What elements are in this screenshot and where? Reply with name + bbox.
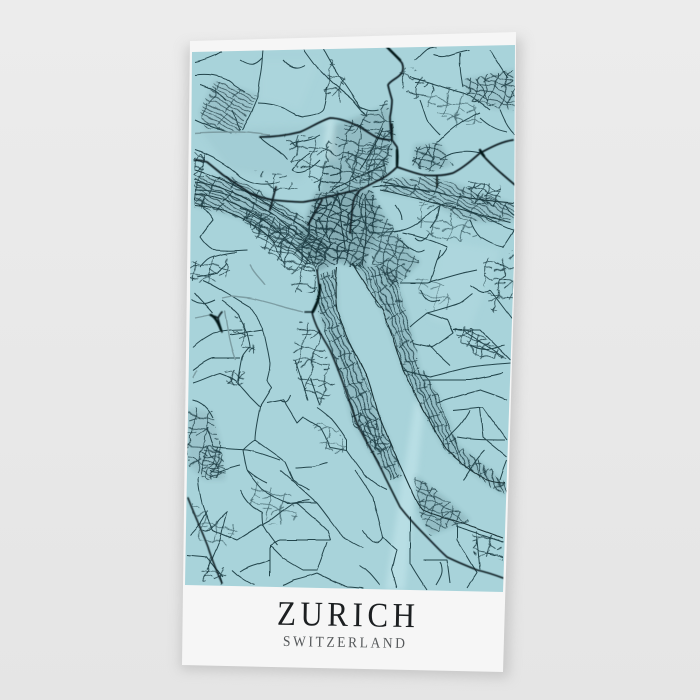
towel [182,32,516,672]
map panel [185,45,515,592]
title: ZURICH: ZURICH [277,595,415,636]
fabric folds [324,120,424,590]
southern motorway [188,270,503,583]
heavy junctions [211,47,484,330]
grey waterway [193,132,303,378]
map background [185,45,515,592]
road lines [187,47,515,590]
minor roads west [192,252,387,490]
minor roads centre [195,137,515,260]
towel body [182,32,516,672]
road network [187,47,515,590]
dense street blocks [188,55,515,585]
minor roads east [400,240,513,480]
lake shoreline roads [336,263,505,538]
parallel rail corridor [195,128,514,265]
minor roads south [187,470,503,590]
dense area tone [188,70,515,535]
towel shadow [180,38,522,678]
major roads [188,47,515,583]
subtitle: SWITZERLAND: SWITZERLAND [283,633,405,652]
minor roads north [195,47,515,185]
